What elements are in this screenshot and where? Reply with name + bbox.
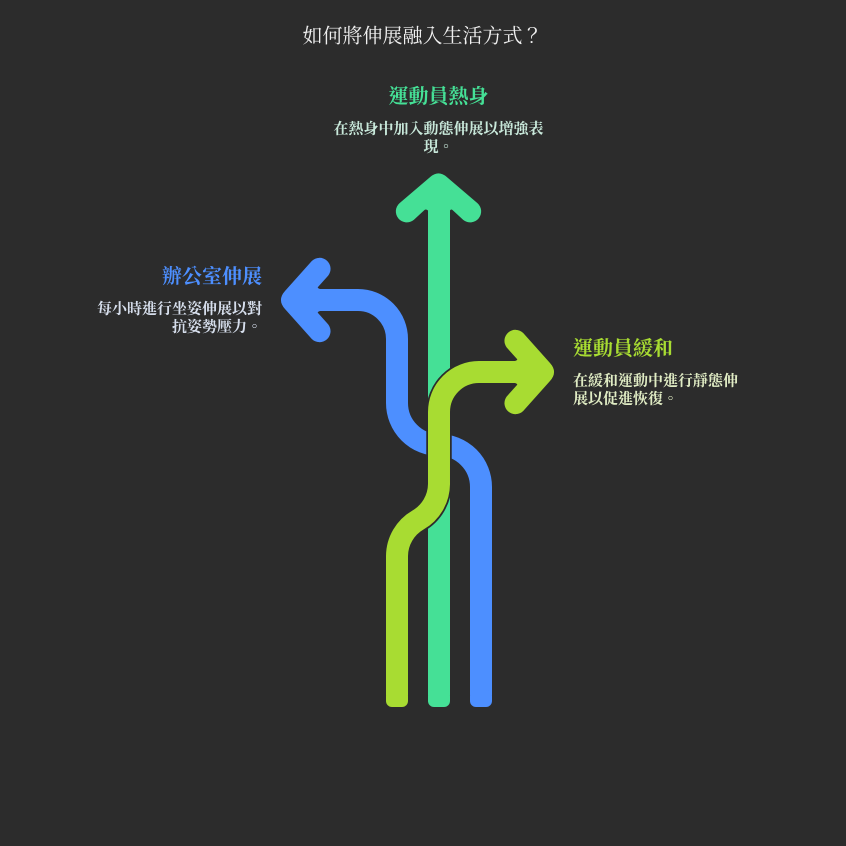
arrow: green straight up [396,173,481,707]
arrow: lime right turn [386,330,554,707]
description: athlete warm-up: 現。 [423,138,454,156]
heading: office stretch: 辦公室伸展 [162,264,262,288]
description: athlete cool-down: 展以促進恢復。 [573,390,678,408]
description: athlete cool-down: 在緩和運動中進行靜態伸 [573,372,738,390]
label: athlete cool-down [573,337,738,408]
arrow diagram [281,173,554,707]
arrow: blue left turn [281,258,492,707]
title: 如何將伸展融入生活方式？ [302,24,542,48]
description: athlete warm-up: 在熱身中加入動態伸展以增強表 [333,120,544,138]
label: athlete warm-up [333,85,544,156]
heading: athlete cool-down: 運動員緩和 [573,337,673,360]
heading: athlete warm-up: 運動員熱身 [388,85,488,108]
label: office stretch [97,264,262,336]
description: office stretch: 抗姿勢壓力。 [172,318,262,336]
lime path halo [397,372,505,700]
description: office stretch: 每小時進行坐姿伸展以對 [97,300,262,318]
